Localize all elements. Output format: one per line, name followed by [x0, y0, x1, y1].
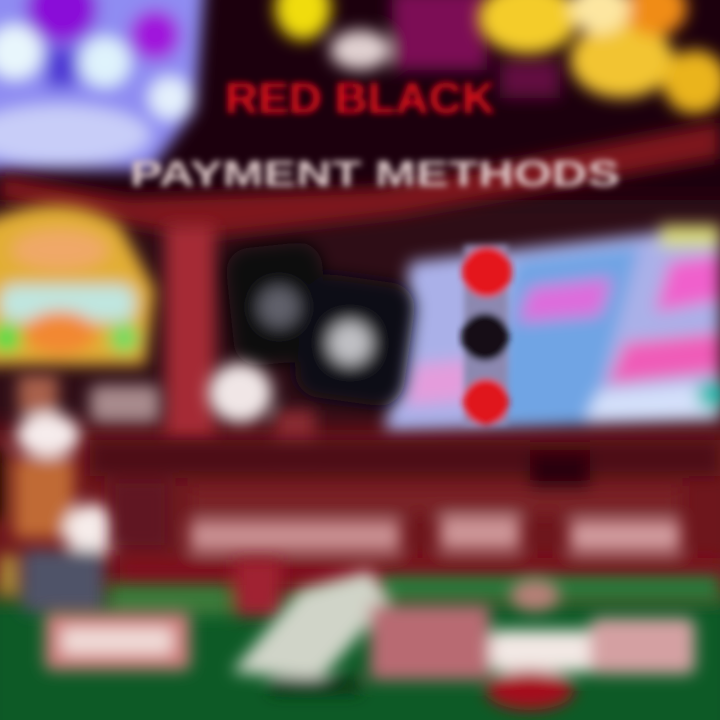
- panel: top decorations: [275, 0, 560, 98]
- icon: character left: [0, 375, 120, 612]
- panel: balloons top left: [0, 0, 205, 170]
- panel: maroon table row: [90, 440, 720, 584]
- text: small labels under left panel: [90, 363, 315, 460]
- red torii beam: [0, 122, 720, 238]
- panel: betting board right: [385, 225, 720, 432]
- panel: rainbow sign left: [0, 205, 155, 365]
- icon: black dice: [224, 240, 418, 409]
- heading: payment methods: PAYMENT METHODS: [130, 153, 620, 194]
- button: red label left: [45, 612, 190, 670]
- heading: red black: RED BLACK: [225, 74, 495, 123]
- icon: red and black dots: [461, 245, 512, 425]
- icon: gold coins: [478, 0, 720, 114]
- panel: chips and cards on table: [232, 570, 695, 710]
- panel: green table: [110, 560, 720, 616]
- red column: [165, 225, 215, 440]
